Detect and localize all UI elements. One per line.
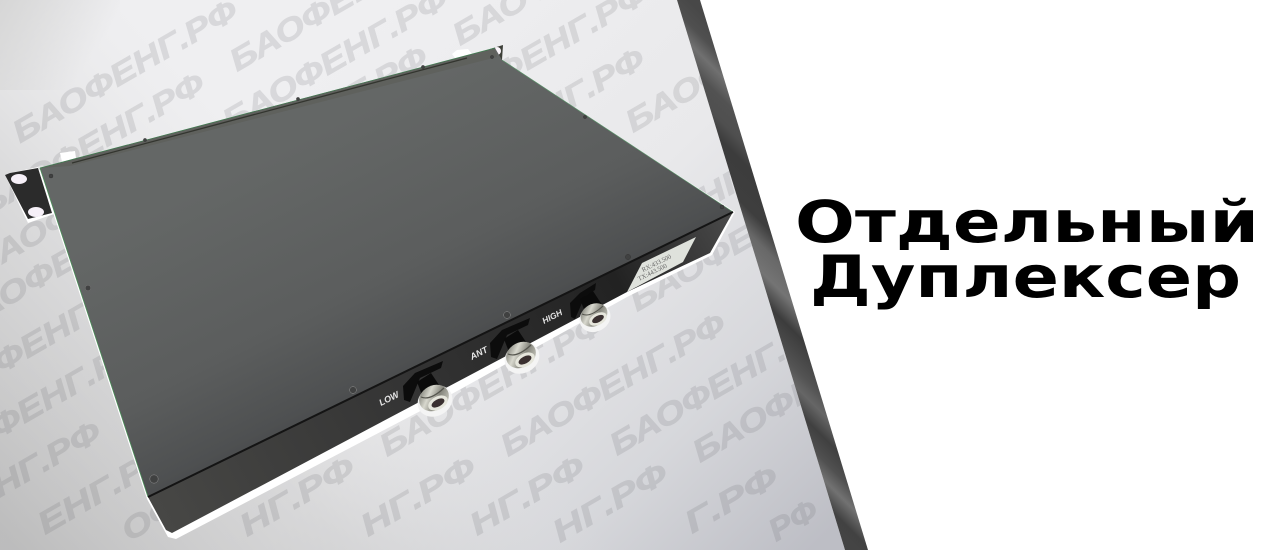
connector HIGH xyxy=(540,283,615,337)
dark diagonal band xyxy=(677,0,868,550)
connector LOW xyxy=(377,361,458,423)
sticker: RX:433.500 xyxy=(641,253,673,274)
connector LOW: LOW xyxy=(377,389,402,408)
sticker: TX:443.500 xyxy=(637,263,668,283)
watermark pattern: РФ xyxy=(762,492,824,548)
watermark pattern: БАОФЕНГ.РФ xyxy=(413,40,651,198)
black seam between top and front xyxy=(148,212,733,497)
watermark pattern: НГ.РФ xyxy=(546,455,674,549)
watermark pattern: БАОФЕНГ.РФ xyxy=(686,311,924,469)
watermark pattern: БАОФЕНГ.РФ xyxy=(494,305,732,463)
duplexer device photo xyxy=(5,45,735,539)
grey background panel xyxy=(0,0,924,550)
watermark pattern: БАОФЕНГ.РФ xyxy=(373,305,611,463)
watermark pattern: БАОФЕНГ.РФ xyxy=(571,127,809,285)
watermark pattern: НГ.РФ xyxy=(233,449,361,543)
watermark pattern: БАОФЕНГ.РФ xyxy=(603,304,841,462)
watermark pattern: ОФЕНГ.РФ xyxy=(115,416,309,548)
screws xyxy=(49,55,724,483)
watermark pattern: БАОФЕНГ.РФ xyxy=(196,38,434,196)
title line 1: Отдельный xyxy=(795,188,1259,256)
watermark pattern: БАОФЕНГ.РФ xyxy=(619,0,857,139)
connector ANT xyxy=(467,318,545,380)
watermark pattern: БАОФЕНГ.РФ xyxy=(416,0,654,133)
connector HIGH: HIGH xyxy=(540,307,565,326)
left rack bracket xyxy=(5,167,54,223)
watermark pattern: БАОФЕНГ.РФ xyxy=(216,0,454,138)
watermark pattern: НГ.РФ xyxy=(354,449,482,543)
sticker xyxy=(627,237,696,292)
watermark pattern: Г.РФ xyxy=(678,458,785,540)
title line 2: Дуплексер xyxy=(810,243,1241,311)
top edge strip with groove xyxy=(40,48,733,497)
title xyxy=(795,188,1259,311)
watermark pattern: БАОФЕНГ.РФ xyxy=(6,0,244,150)
watermark pattern xyxy=(0,0,816,543)
right rack bracket xyxy=(488,45,503,60)
watermark pattern: НГ.РФ xyxy=(463,448,591,542)
connector ANT: ANT xyxy=(467,344,491,362)
watermark pattern: БАОФЕНГ.РФ xyxy=(623,160,861,318)
watermark pattern: ЕНГ.РФ xyxy=(31,434,181,541)
white mounting tabs xyxy=(60,49,472,162)
front side panel xyxy=(148,212,733,533)
white halo around device xyxy=(39,60,735,539)
top cover xyxy=(40,48,733,497)
